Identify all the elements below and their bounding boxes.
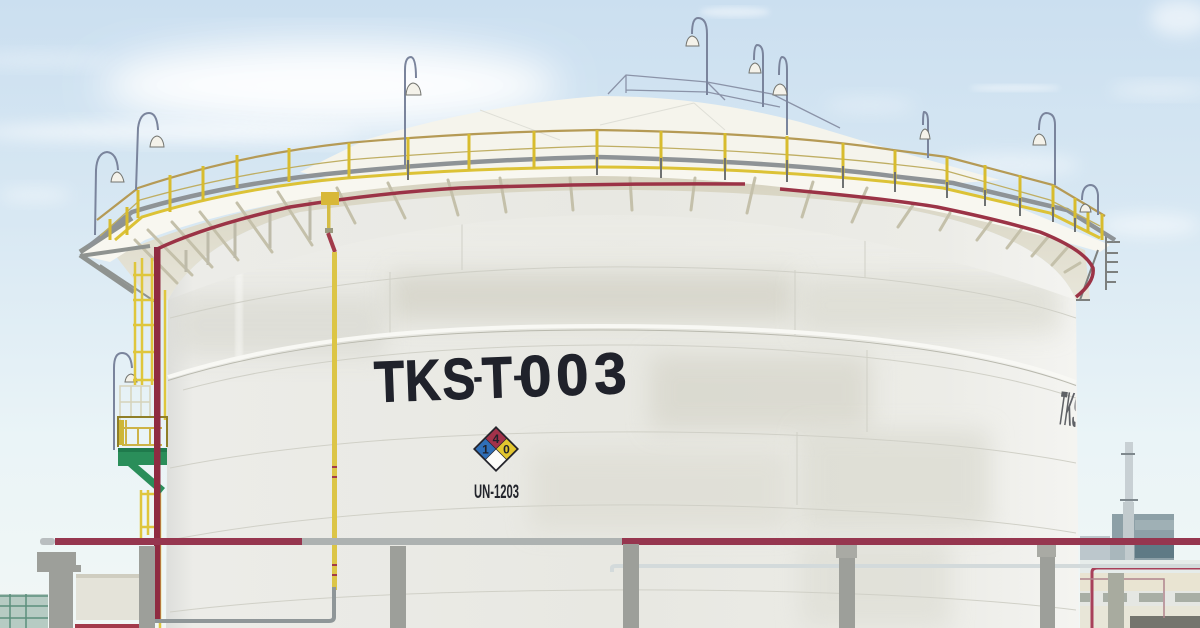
tank name label: 3: [593, 341, 628, 407]
handrail top line: [97, 130, 1105, 220]
walkway post feet: [408, 157, 1075, 232]
hazard diamond: 0: [503, 442, 510, 456]
deck underside edge: [80, 164, 1110, 262]
tank stiffener ring: [168, 326, 1076, 382]
handrail mid line: [100, 146, 1100, 236]
ladder: [133, 258, 165, 628]
left gantry frame: [80, 218, 160, 305]
red pipe left ring: [155, 184, 745, 250]
tank name label: T: [373, 349, 406, 415]
handrail posts: [110, 130, 1102, 240]
clouds: [0, 0, 1200, 236]
walkway grey rail: [88, 157, 1115, 247]
green platform support: [118, 448, 167, 494]
tank weathering: [175, 200, 1080, 628]
tank name label: K: [404, 348, 442, 414]
yellow vertical pipe: [321, 192, 339, 590]
ladder cage top: [120, 386, 150, 430]
support brackets: [135, 178, 1080, 283]
tank name label: T: [481, 345, 514, 411]
tank name label: -: [473, 360, 483, 394]
hazard diamond: 4: [493, 432, 500, 446]
tank shoulder underside: [115, 170, 1090, 300]
foreground top pipe: [40, 538, 1200, 545]
yellow platform cage: [118, 417, 167, 447]
scene: storage tank photograph: TKS: [1055, 382, 1084, 438]
UN number: UN-1203: [474, 482, 519, 503]
tank shell: [166, 185, 1079, 628]
roof dome: [300, 96, 1000, 195]
tank name label: -: [513, 359, 523, 392]
grey drain pipe: [155, 587, 334, 621]
tank name label: 0: [518, 344, 553, 410]
tank name label: [373, 341, 628, 415]
lamp posts: [95, 18, 1098, 450]
lamp heads: [111, 36, 1091, 382]
walkway lower yellow rail: [115, 167, 1100, 240]
hazard diamond: [473, 426, 519, 472]
tank name label: 0: [555, 342, 590, 408]
vertical red pipe: [154, 247, 160, 620]
foreground white pipe: [612, 566, 1200, 572]
background refinery stack and plant: [1080, 442, 1200, 574]
background building right: [1080, 568, 1200, 628]
bracket shadows: [186, 200, 310, 272]
hazard diamond: 1: [482, 442, 489, 456]
right gantry frame: [1076, 236, 1120, 300]
tank panel seams: [170, 215, 1076, 612]
tank name label: S: [441, 347, 476, 412]
foreground concrete posts: [37, 544, 1124, 628]
roof handrail: [608, 75, 840, 128]
red pipe right ring: [780, 189, 1093, 297]
background building left: [0, 574, 155, 628]
